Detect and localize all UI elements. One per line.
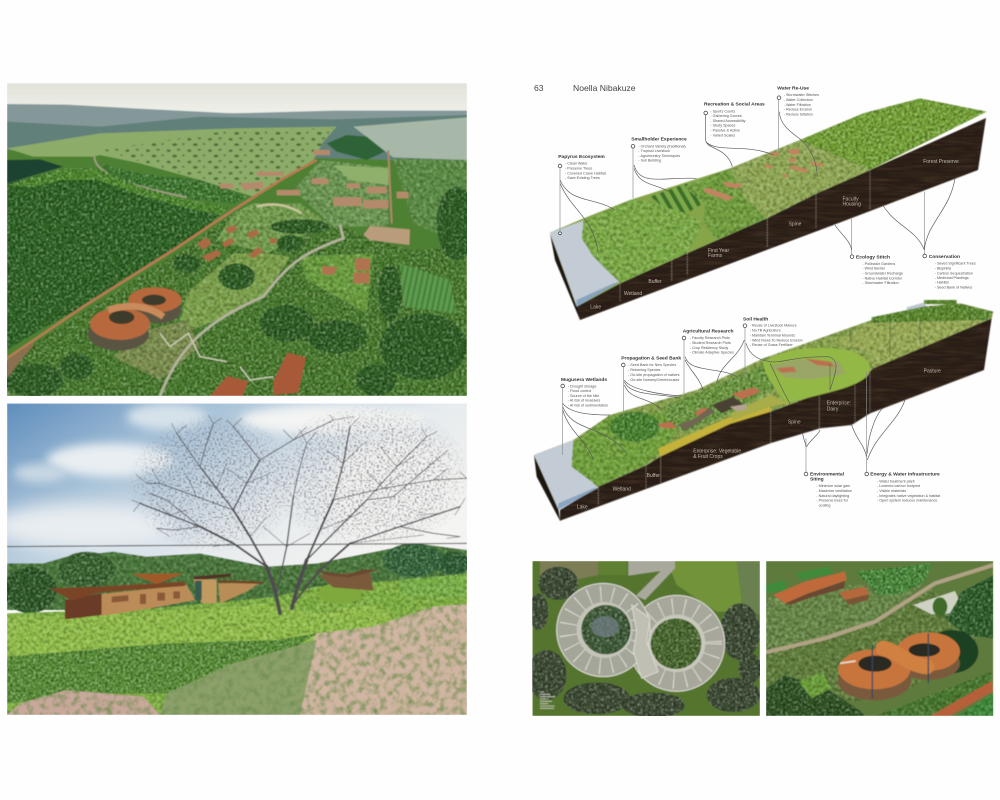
callout: Smallholder Experience: - Orchard Variety (traditional) <box>638 144 686 148</box>
ground texture <box>766 585 922 652</box>
callout: Propagation and Seed Bank: - Returning Species <box>628 368 661 372</box>
far forest and fields <box>7 135 388 227</box>
bare tree <box>127 403 473 613</box>
callout: Recreation and Social Areas: - Varied Scales <box>710 133 735 137</box>
section label: Lake: Lake <box>590 304 601 310</box>
callout: Water Re-Use: Water Re-Use <box>777 86 809 92</box>
roofs and buildings <box>657 358 835 428</box>
terrain block <box>534 300 993 521</box>
callout: Environmental Siting: cooling <box>819 504 830 508</box>
section label: First Year Farms: Farms <box>708 253 723 259</box>
callout: Recreation and Social Areas: - Gathering Groves <box>710 114 742 118</box>
red earth road <box>930 681 993 716</box>
callout: Agricultural Research: - Student Research Plots <box>690 341 731 345</box>
callout: Energy and Water Infrastructure: Energy & Water Infrastructure <box>870 472 940 478</box>
surface <box>534 303 993 509</box>
diagram: first section through campus <box>550 98 987 320</box>
terrain block <box>550 98 987 320</box>
callout: Soil Health: - Reuse of Livestock Manure <box>750 324 797 328</box>
callout: Environmental Siting: Environmental <box>810 473 844 478</box>
earth front face <box>577 118 986 320</box>
callout: Mugusera Wetlands: - At risk of invasives <box>568 399 600 403</box>
callout: Papyrus Ecosystem: - Save Existing Trees <box>565 176 600 180</box>
lake <box>550 221 620 306</box>
left side face <box>534 455 560 521</box>
section label: Wetland: Wetland <box>624 291 642 297</box>
wetland forest <box>572 412 680 487</box>
callout: Agricultural Research: - Climate Adaptive Species <box>690 351 734 355</box>
section label: Buffer: Buffer <box>647 473 660 479</box>
callout: Mugusera Wetlands: Mugusera Wetlands <box>561 377 607 383</box>
callout: Smallholder Experience: - Soil Building <box>638 159 661 163</box>
section label: Enterprise Vegetable and Fruit Crops: Enterprise: Vegetable <box>693 448 741 454</box>
left ring <box>557 583 650 677</box>
callout: Mugusera Wetlands: - Source of the Nile <box>568 394 599 398</box>
callout: Water Re-Use: - Water Filtration <box>784 103 811 107</box>
lower right green <box>875 672 992 716</box>
callout: Ecology Stitch: - Stormwater Filtration <box>862 281 899 285</box>
callout: Soil Health <box>717 316 836 403</box>
building roofs <box>703 149 824 201</box>
sky with clouds <box>0 403 473 570</box>
callout: Conservation: - Medicinal Plantings <box>935 276 969 280</box>
entry walkway <box>628 561 675 600</box>
callout: Conservation <box>883 178 976 290</box>
callout: Propagation and Seed Bank <box>621 355 682 412</box>
callout: Ecology Stitch: - Pollinator Gardens <box>862 262 895 266</box>
section label: Enterprise Dairy: Enterprise: <box>827 401 851 407</box>
farm section <box>730 140 870 218</box>
callout: Recreation and Social Areas: - Study Spaces <box>710 124 736 128</box>
section label: Spine: Spine <box>788 420 801 426</box>
callout: Mugusera Wetlands: - Flood control <box>568 389 591 393</box>
dairy circle bulge <box>763 348 870 403</box>
callout: Soil Health: - Maintain Terminal Mounds <box>750 333 795 337</box>
callout: Environmental Siting: Siting <box>810 477 824 483</box>
infinity building <box>88 287 182 351</box>
callout: Ecology Stitch: - Wind Barrier <box>862 267 886 271</box>
lawns and fields <box>540 561 760 615</box>
section label: Pasture: Pasture <box>924 368 941 374</box>
callout: Energy and Water Infrastructure: - Integrates native vegetation & habitat <box>877 494 940 498</box>
section label: Enterprise Vegetable and Fruit Crops: & Fruit Crops <box>693 454 723 460</box>
callout: Smallholder Experience: Smallholder Experience <box>631 137 687 143</box>
section dividers <box>598 368 870 505</box>
callout: Papyrus Ecosystem: - Preserve Trees <box>565 166 592 170</box>
village buildings <box>197 150 410 283</box>
callout: Energy and Water Infrastructure: - Open system reduces maintenance <box>877 499 937 503</box>
callout: Propagation and Seed Bank: - On-site propagation of natives <box>628 373 680 377</box>
orchard rows <box>650 183 703 213</box>
callout: Propagation and Seed Bank: Propagation & Seed Bank <box>621 355 681 361</box>
callout: Environmental Siting: - Natural daylighting <box>816 494 849 498</box>
callout: Environmental Siting: - Minimize solar gain <box>816 484 850 488</box>
callout: Environmental Siting: - Maximize ventilation <box>816 489 852 493</box>
top left green patches <box>766 567 832 593</box>
header: author name: Noella Nibakuze <box>573 83 636 93</box>
building: right pavilion <box>312 569 380 591</box>
tan road <box>766 565 993 652</box>
infinity building <box>838 632 960 700</box>
section label: Forest Preserve: Forest Preserve <box>923 159 959 165</box>
photo: aerial view of infinity building <box>766 561 993 716</box>
building shadow <box>925 630 978 673</box>
section dividers <box>620 170 870 302</box>
plan legend <box>540 692 555 709</box>
foreground buildings <box>210 353 306 396</box>
callout: Papyrus Ecosystem: - Clean Water <box>565 162 588 166</box>
callout: Energy and Water Infrastructure: - Visible materials <box>877 489 906 493</box>
callout: Recreation and Social Areas: Recreation & Social Areas <box>704 102 765 108</box>
callout: Agricultural Research <box>682 328 737 397</box>
header: page number: 63 <box>534 83 544 93</box>
callout: Water Re-Use: - Water Collection <box>784 98 813 102</box>
callout: Soil Health: - Wind Rows To Reduce Erosion <box>750 338 803 342</box>
pasture with scattered trees <box>7 127 337 197</box>
callout: Environmental Siting: - Preserve trees for <box>816 499 849 503</box>
crop field <box>855 563 932 595</box>
yellow crop strip <box>658 404 771 457</box>
callout: Energy and Water Infrastructure: - Lowered carbon footprint <box>877 484 920 488</box>
callout: Recreation and Social Areas: - Shared Accessibility <box>710 119 746 123</box>
callout: Papyrus Ecosystem: Papyrus Ecosystem <box>558 154 605 160</box>
callout: Mugusera Wetlands <box>561 377 627 460</box>
callout: Water Re-Use: - Reduce Erosion <box>784 108 812 112</box>
section label: Faculty Housing: Faculty <box>842 196 859 202</box>
building: long house left <box>50 573 263 619</box>
callout: Water Re-Use: - Reduce Siltation <box>784 112 813 116</box>
callout: Conservation: - Habitat <box>935 281 949 285</box>
photo: aerial view of campus <box>3 83 477 397</box>
white ground patch <box>913 591 958 614</box>
callout: Water Re-Use: - Stormwater Stitches <box>784 93 819 97</box>
callout: Smallholder Experience: - Agroforestry Techniques <box>638 154 680 158</box>
callout: Energy and Water Infrastructure <box>852 372 940 503</box>
callout: Ecology Stitch <box>835 218 903 285</box>
callout: Recreation and Social Areas: - Sports Courts <box>710 109 735 113</box>
top left buildings <box>773 572 869 605</box>
diagram: second section through campus <box>534 300 993 521</box>
sky <box>7 83 467 113</box>
callout: Mugusera Wetlands: - Drought storage <box>568 384 596 388</box>
section label: Lake: Lake <box>577 504 588 510</box>
surface <box>550 98 987 307</box>
callout: Conservation: Conservation <box>929 254 960 260</box>
distant hills <box>7 104 467 247</box>
callout: Agricultural Research: Agricultural Research <box>683 328 734 334</box>
callout: Mugusera Wetlands: - At risk of sedimentation <box>568 404 608 408</box>
callout: Water Re-Use <box>777 86 819 177</box>
surrounding tree canopy <box>527 567 762 718</box>
earth front face <box>560 318 992 521</box>
back forest strip <box>872 303 993 323</box>
main dark forest <box>7 168 230 350</box>
callout: Recreation and Social Areas: - Passive & Active <box>710 129 740 133</box>
section label: Spine: Spine <box>789 222 802 228</box>
callout: Smallholder Experience <box>631 137 697 198</box>
callout: Soil Health: - Reuse of Grass Fertilizer <box>750 343 794 347</box>
green meadow <box>7 573 467 715</box>
pink grass <box>7 604 467 715</box>
lower left dark vegetation <box>766 675 865 716</box>
callout: Conservation: - Biophilia <box>935 266 952 270</box>
central crossing <box>632 605 658 678</box>
tree mass right <box>945 575 993 638</box>
pasture <box>830 320 987 368</box>
callout: Conservation: - Saved Significant Trees <box>935 261 976 265</box>
callout: Recreation and Social Areas <box>704 102 773 167</box>
callout: Agricultural Research: - Crop Resiliency Study <box>690 346 728 350</box>
callout: Conservation: - Carbon Sequestration <box>935 271 973 275</box>
section label: Wetland: Wetland <box>613 486 631 492</box>
overhead wire <box>7 543 467 547</box>
callout: Papyrus Ecosystem <box>558 154 615 253</box>
background treeline <box>3 543 470 613</box>
section label: Enterprise Dairy: Dairy <box>827 406 839 412</box>
wetland vegetation <box>582 200 703 283</box>
tree clusters <box>3 187 477 397</box>
section label: First Year Farms: First Year <box>708 248 729 254</box>
callout: Soil Health: Soil Health <box>743 316 768 322</box>
callout: Propagation and Seed Bank: - On-site Nursery/Greenhouses <box>628 378 679 382</box>
callout: Soil Health: - No Till Agriculture <box>750 328 781 332</box>
back hill pieces <box>907 303 930 313</box>
left side face <box>550 233 580 320</box>
callout: Agricultural Research: - Faculty Research Plots <box>690 336 730 340</box>
callout: Conservation: - Seed Bank of Natives <box>935 286 973 290</box>
section label: Faculty Housing: Housing <box>842 202 861 208</box>
section label: Buffer: Buffer <box>648 279 662 285</box>
right ring <box>629 595 725 691</box>
callout: Ecology Stitch: Ecology Stitch <box>856 254 890 260</box>
lake <box>534 440 598 509</box>
callout: Energy and Water Infrastructure: - Water treatment plant <box>877 479 915 483</box>
lower mid ground <box>7 203 467 396</box>
callout: Environmental Siting <box>803 430 852 508</box>
callout: Propagation and Seed Bank: - Seed Bank for New Species <box>628 363 676 367</box>
callout: Smallholder Experience: - Tropical Livestock <box>638 149 670 153</box>
callout: Ecology Stitch: - Native Habitat Corridor <box>862 276 903 280</box>
farm rows <box>663 365 783 432</box>
site plan: infinity shaped building from above <box>527 561 762 718</box>
roads <box>7 150 392 396</box>
callout: Papyrus Ecosystem: - Crowned Crane Habitat <box>565 171 606 175</box>
forest preserve <box>800 98 987 169</box>
callout: Ecology Stitch: - Groundwater Recharge <box>862 272 903 276</box>
photo: tree and rammed earth housing <box>0 403 473 715</box>
